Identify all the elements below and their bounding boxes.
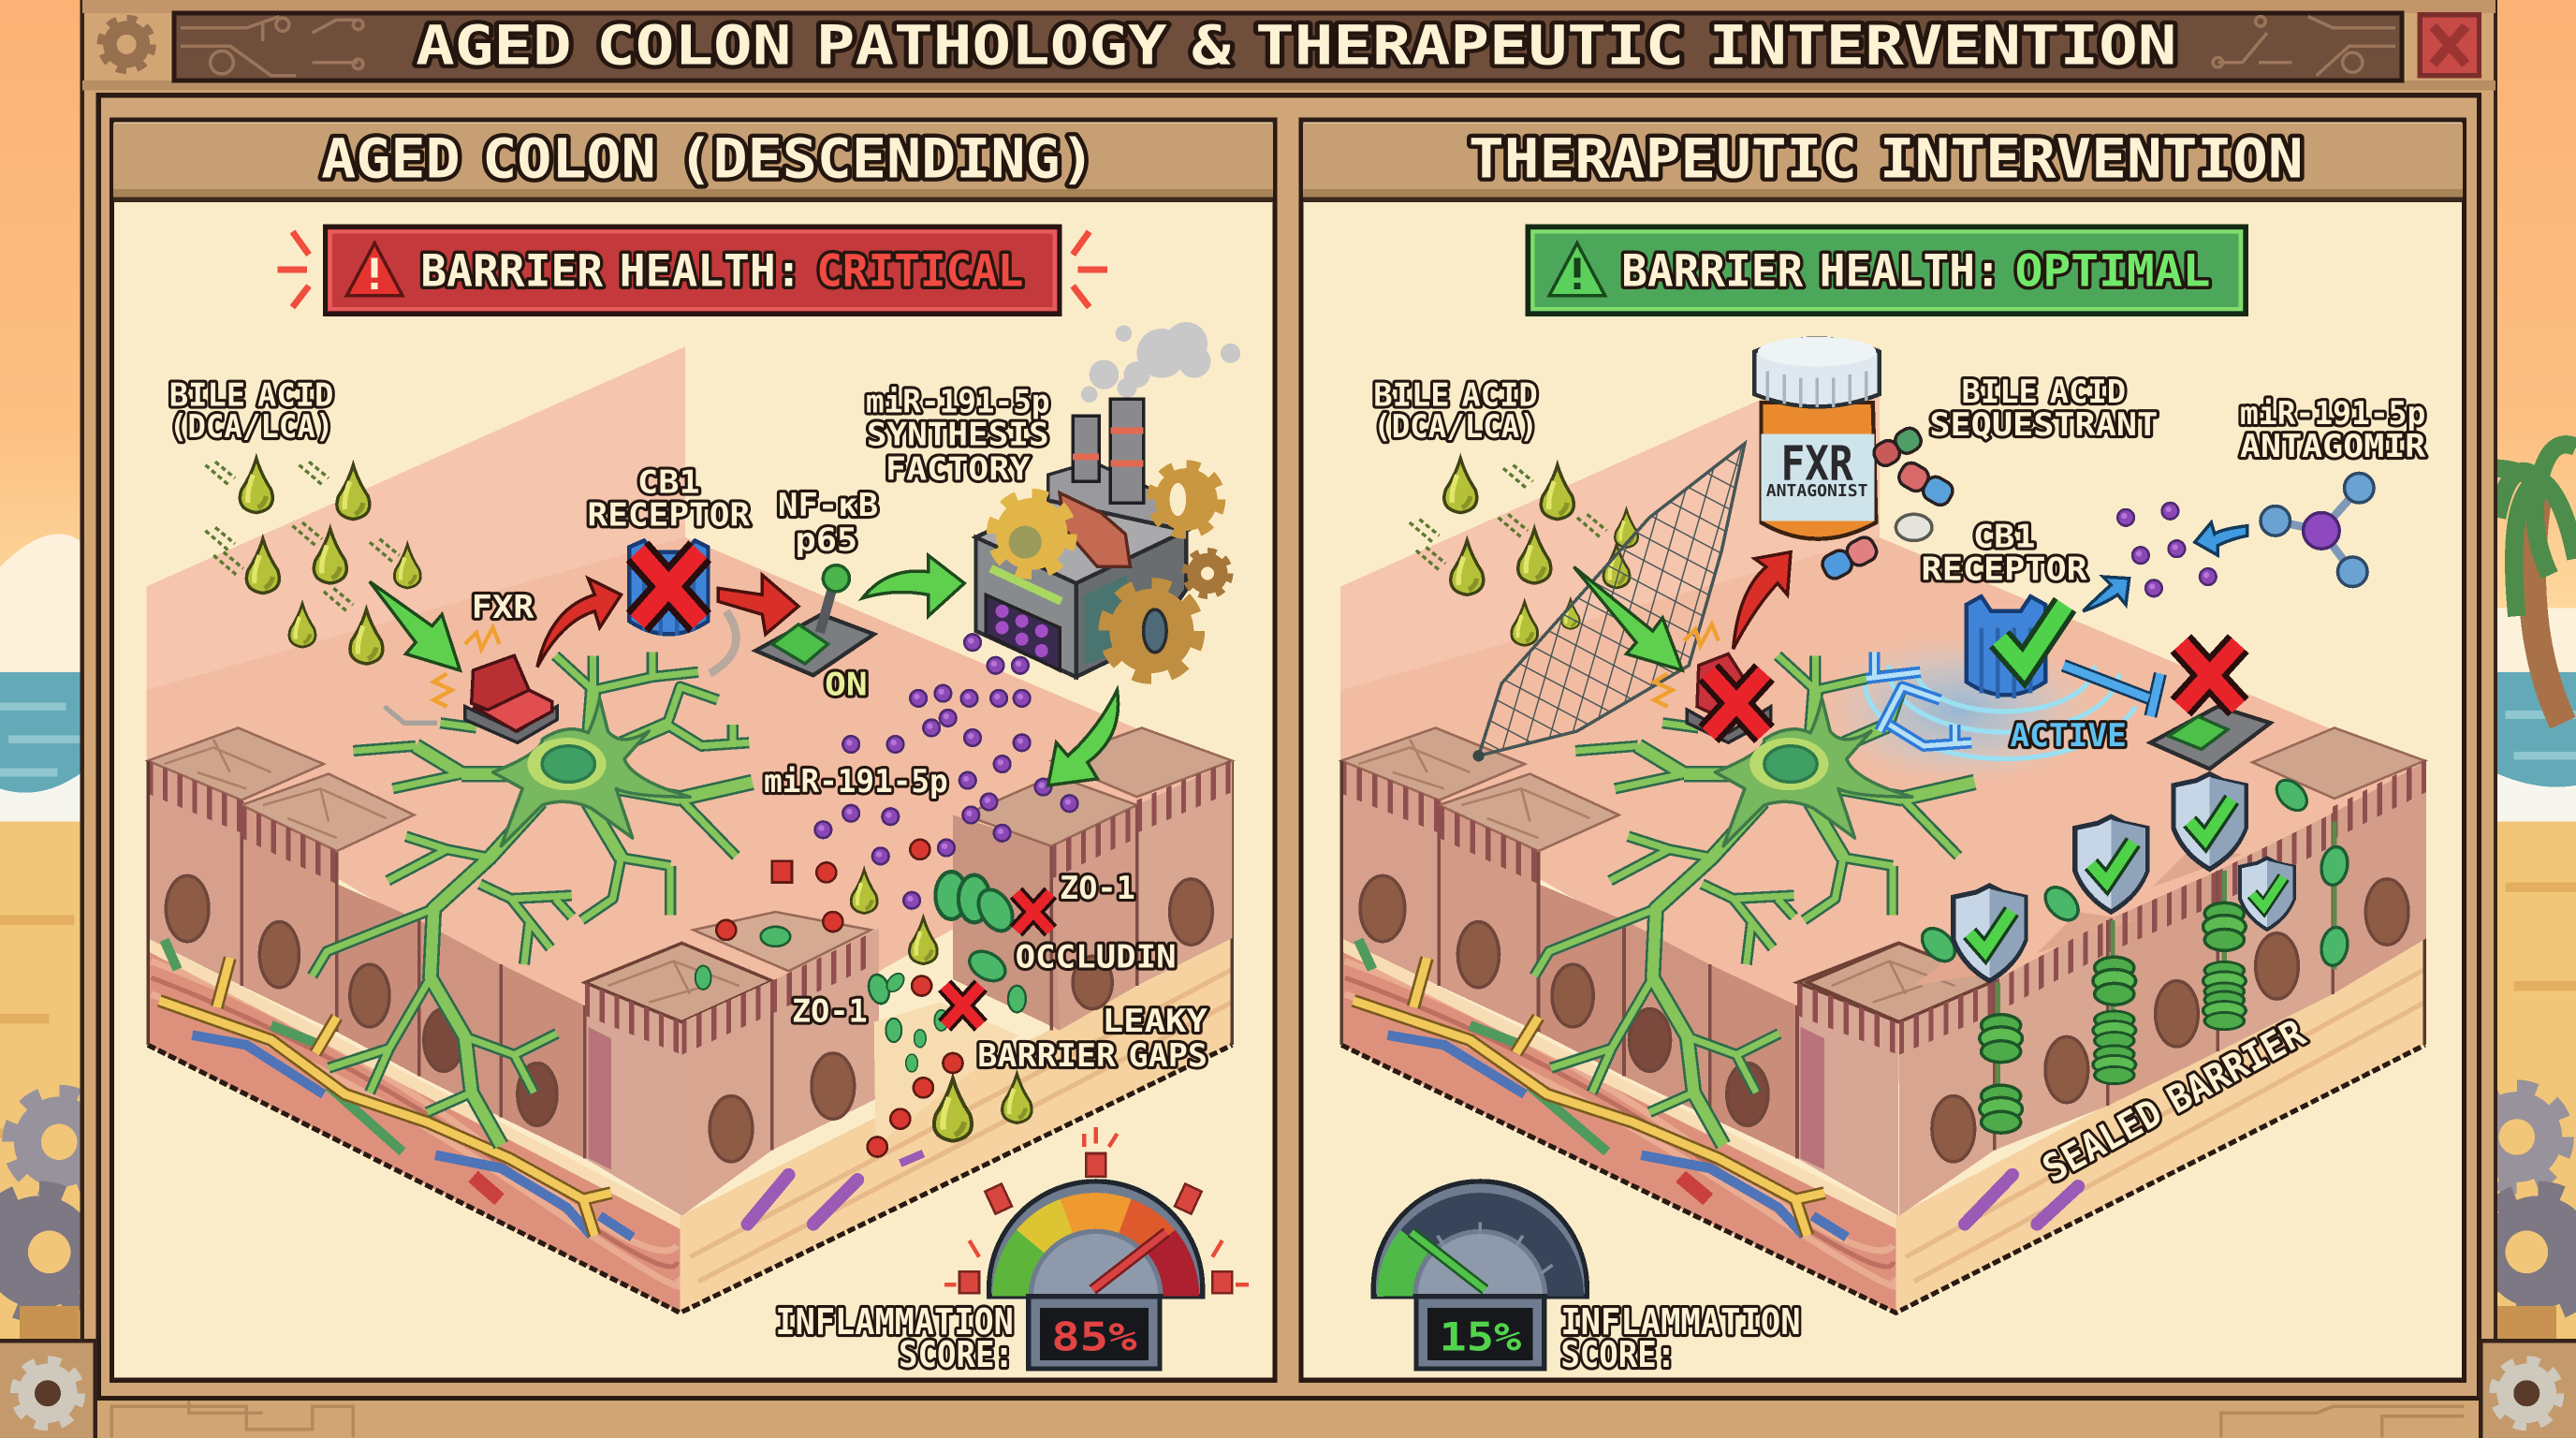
arrow: feedback [710,611,736,674]
panel: therapeutic intervention [1301,120,2465,1380]
cell wall and lamina: left side [148,727,772,1313]
title bar [174,13,2402,81]
antagomir label: miR-191-5p [2240,395,2425,433]
junction labels: LEAKY [1103,1003,1208,1040]
icon: settings gear [103,21,150,67]
panel heading [113,124,1273,202]
antagomir label [2240,395,2426,465]
epithelial cells: right side, sealed [1808,727,2426,1216]
icon: close button [2420,15,2479,76]
debris: damaged tight junctions [695,840,1032,1164]
gauge: inflammation 85% [944,1127,1249,1369]
CB1 label [587,464,751,535]
icon: synthesis factory [976,322,1240,677]
icon: NF-kB switch on [755,565,874,675]
junction labels: OCCLUDIN [1016,939,1177,976]
gauge: inflammation 15%: 15% [1439,1314,1522,1360]
gauge: inflammation 85%: 85% [1051,1314,1137,1360]
neuron [313,653,753,1145]
icon: CB1 receptor blocked [629,540,708,636]
NF-kB label: p65 [795,521,857,559]
decorative gears [14,1092,2562,1187]
CB1 label [1922,518,2087,589]
icon: junction break marks [944,893,1050,1025]
tissue back wall and floor [1340,346,2424,1084]
lamina: right side [1341,761,2424,1313]
CB1 label: RECEPTOR [1922,551,2087,589]
status banner: optimal: BARRIER HEALTH: [1621,245,2001,297]
corner box: right gear [2481,1341,2576,1438]
arrow: bile acid to FXR [1573,566,1682,670]
inflammation score label: SCORE: [1560,1334,1676,1376]
tissue back wall and floor [146,346,1232,1084]
arrow: FXR to antagonist [1734,552,1791,649]
bile acid label [1373,376,1538,446]
junction labels: ZO-1 [792,993,868,1031]
miR-191-5p particles [815,634,1077,909]
icon: FXR antagonist pill bottle: ANTAGONIST [1766,482,1868,501]
status banner: critical: BARRIER HEALTH: [420,245,802,297]
status banner: critical [326,227,1060,314]
inflammation score label: INFLAMMATION [775,1301,1014,1343]
icon: pills [1819,425,1956,582]
bile acid droplets [205,459,420,664]
FXR label: FXR [472,589,534,626]
inflammation score label [775,1301,1014,1376]
sealed barrier label: SEALED BARRIER [2035,1011,2313,1192]
status banner: optimal: OPTIMAL [2015,245,2210,297]
CB1 label: CB1 [637,464,700,502]
miR label: miR-191-5p [764,763,948,800]
NF-kB label: NF-κB [778,487,878,524]
bile acid label: (DCA/LCA) [169,408,333,446]
factory label: miR-191-5p [866,384,1050,421]
sequestrant label: SEQUESTRANT [1929,406,2158,444]
icon: NF-kB switch off [2150,644,2271,769]
corner box: left gear [0,1341,95,1438]
CB1 label: RECEPTOR [587,497,751,535]
tight junction strands [1916,774,2350,1133]
title text: AGED COLON PATHOLOGY & THERAPEUTIC INTERVENTION [416,13,2176,77]
ACTIVE label: ACTIVE [2010,717,2127,755]
bile acid label: BILE ACID [169,376,333,414]
icon: FXR switch [385,627,557,742]
inflammation score label [1560,1301,1801,1376]
icon: protective shields [1954,774,2294,981]
inflammation score label: INFLAMMATION [1560,1301,1801,1343]
CB1 active glow [1819,634,2136,785]
lamina: right side [148,761,1232,1313]
bile acid label: BILE ACID [1373,376,1538,414]
status banner: critical: CRITICAL [816,245,1023,297]
arrow: bile acid to FXR [370,581,460,670]
arrow: particles to cells [1048,690,1119,785]
gauge: inflammation 15% [1373,1181,1587,1369]
icon: FXR antagonist pill bottle: FXR [1781,436,1853,492]
frame bottom circuit strip [111,1400,2465,1438]
panel: aged colon [111,120,1275,1380]
icon: antagomir molecule [2261,473,2374,587]
inhibition line [2063,666,2160,716]
antagomir label: ANTAGOMIR [2240,428,2426,465]
sequestrant label [1929,374,2158,444]
panel heading: AGED COLON (DESCENDING) [321,127,1095,191]
factory label: FACTORY [886,450,1031,488]
palm tree [2494,445,2576,723]
alarm rays [278,231,1107,307]
factory label: SYNTHESIS [867,417,1049,454]
arrow: NF-kB to factory [862,555,964,616]
bile acid label: (DCA/LCA) [1373,408,1538,446]
arrow: CB1 to miR [2083,577,2130,611]
status banner: optimal [1528,227,2246,314]
junction labels [792,870,1208,1075]
icon: CB1 receptor active [1967,596,2065,698]
junction labels: BARRIER GAPS [977,1037,1208,1075]
arrow: antagomir to miR [2195,522,2247,555]
factory label [866,384,1050,488]
icon: status triangle [1549,243,1605,296]
junction labels: ZO-1 [1060,870,1135,907]
icon: FXR antagonist pill bottle [1754,337,1880,539]
bile acid droplets [1410,459,1638,645]
icon: warning triangle [346,243,402,296]
neuron [1534,653,1975,1145]
inflammation score label: SCORE: [899,1334,1014,1376]
bile acid label [169,376,333,446]
NF-kB label [778,487,878,559]
net: bile acid sequestrant [1472,444,1745,761]
ON label: ON [825,666,868,703]
sequestrant label: BILE ACID [1962,374,2126,411]
cell wall and lamina: left side [1341,727,1993,1313]
arrow: FXR to CB1 [537,579,621,668]
epithelial cells: right side, damaged [681,727,1232,1216]
panel heading [1303,124,2463,202]
CB1 label: CB1 [1973,518,2036,555]
panel heading: THERAPEUTIC INTERVENTION [1469,127,2304,191]
miR particles [2117,503,2217,596]
arrow: CB1 to NF-kB [718,575,798,634]
icon: FXR switch inhibited [1654,624,1771,742]
